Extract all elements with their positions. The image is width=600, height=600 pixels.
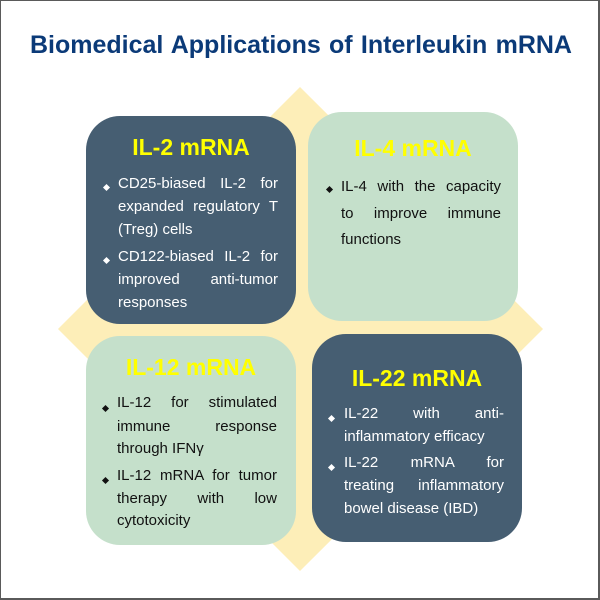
text block: IL-2 bullets: (Treg) cells <box>118 221 192 238</box>
panel: IL-22 mRNA <box>312 334 522 542</box>
panel: IL-2 mRNA <box>86 116 296 324</box>
text block: IL-2 bullets: expanded regulatory T <box>118 198 278 215</box>
text block: IL-12 bullets: through IFNγ <box>117 440 204 457</box>
text block: IL-2 bullets: responses <box>118 294 187 311</box>
panel: IL-12 mRNA <box>86 336 296 545</box>
text block: IL-22 bullets <box>328 405 504 517</box>
text block: IL-22 bullets: IL-22 with anti- <box>344 405 504 422</box>
heading: IL-4 mRNA: IL-4 mRNA <box>354 135 472 161</box>
text block: IL-4 bullets: to improve immune <box>341 205 501 222</box>
text block: IL-12 bullets: IL-12 mRNA for tumor <box>117 467 277 484</box>
text block: IL-12 bullets: cytotoxicity <box>117 512 190 529</box>
heading: IL-22 mRNA: IL-22 mRNA <box>352 365 482 391</box>
text block: IL-12 bullets: IL-12 for stimulated <box>117 394 277 411</box>
text block: IL-22 bullets: bowel disease (IBD) <box>344 500 478 517</box>
text block: IL-12 bullets: therapy with low <box>117 490 277 507</box>
text block: IL-2 bullets: CD25-biased IL-2 for <box>118 175 278 192</box>
text block: IL-12 bullets <box>102 394 277 529</box>
text block: IL-4 bullets: IL-4 with the capacity <box>341 178 501 195</box>
heading: IL-2 mRNA: IL-2 mRNA <box>132 134 250 160</box>
text block: IL-2 bullets: improved anti-tumor <box>118 271 278 288</box>
title: Biomedical Applications of Interleukin mRNA <box>30 31 572 59</box>
text block: IL-22 bullets: inflammatory efficacy <box>344 428 485 445</box>
text block: IL-22 bullets: IL-22 mRNA for <box>344 454 504 471</box>
text block: IL-4 bullets <box>326 178 501 248</box>
text block: IL-2 bullets <box>103 175 278 311</box>
heading: IL-12 mRNA: IL-12 mRNA <box>126 354 256 380</box>
panel: IL-4 mRNA <box>308 112 518 321</box>
text block: IL-4 bullets: functions <box>341 231 401 248</box>
text block: IL-12 bullets: immune response <box>117 418 277 435</box>
text block: IL-2 bullets: CD122-biased IL-2 for <box>118 248 278 265</box>
text block: IL-22 bullets: treating inflammatory <box>344 477 504 494</box>
